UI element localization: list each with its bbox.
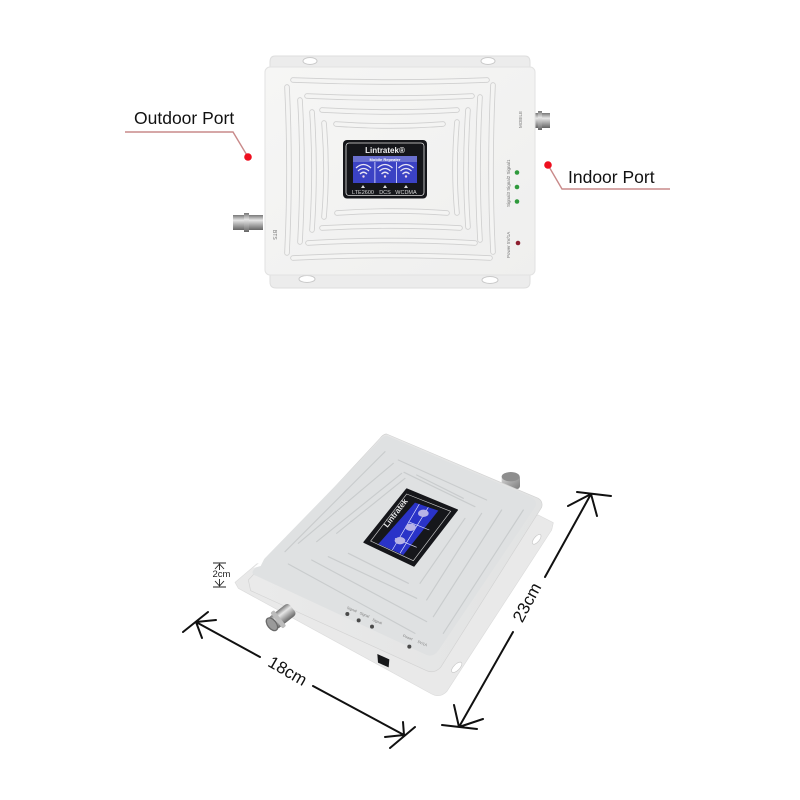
DC power jack — [377, 654, 389, 667]
width dimension: 18cm arrow — [183, 612, 415, 748]
device labels: Signal3 Signal2 Signal1 — [506, 159, 511, 207]
ribs — [285, 452, 523, 633]
LCD display: WCDMA — [395, 190, 417, 196]
LED labels: Signal — [359, 611, 370, 619]
screen — [353, 156, 417, 183]
repeater top view — [233, 56, 550, 288]
status LEDs — [515, 170, 520, 245]
LCD display: DCS — [379, 190, 391, 196]
device labels — [271, 111, 523, 258]
top connector — [502, 472, 520, 489]
flange — [235, 515, 553, 696]
flange notch marks — [253, 455, 361, 568]
left connector — [233, 213, 263, 232]
mounting flange — [270, 56, 530, 288]
body top face — [252, 436, 536, 656]
LCD display — [343, 140, 427, 198]
heat-sink ribs — [287, 80, 493, 258]
LED labels — [346, 606, 428, 648]
wifi icons — [356, 164, 414, 174]
LCD display: Mobile Repeater — [370, 157, 401, 162]
repeater perspective view — [235, 434, 553, 696]
height dimension: 2cm: 2cm — [213, 569, 231, 580]
device labels: Power 5V/1A — [506, 232, 511, 258]
LCD display: Lintratek® — [365, 146, 405, 155]
device labels: BTS — [271, 230, 277, 240]
device labels: MOBILE — [518, 111, 523, 128]
callout: outdoor port: Outdoor Port — [134, 108, 234, 128]
front connector — [262, 600, 299, 635]
LED labels: Signal — [346, 606, 357, 613]
depth dimension: 23cm arrow — [442, 492, 611, 729]
LED labels: Signal — [372, 618, 383, 625]
body panel — [265, 67, 535, 275]
LEDs — [345, 612, 411, 649]
callout: outdoor port — [125, 108, 252, 161]
LCD display: LTE2600 — [352, 190, 374, 196]
LED labels: 5V/1A — [417, 640, 428, 648]
depth dimension: 23cm arrow: 23cm — [509, 580, 545, 625]
height dimension: 2cm — [213, 563, 231, 587]
LCD display — [364, 489, 457, 566]
body side and front band — [248, 434, 542, 672]
callout: indoor port — [544, 161, 670, 189]
width dimension: 18cm arrow: 18cm — [265, 652, 310, 690]
screen — [378, 503, 438, 555]
callout: indoor port: Indoor Port — [568, 167, 655, 187]
logo: Lintratek — [382, 497, 410, 529]
right connector — [533, 111, 550, 130]
LED labels: Power — [402, 634, 414, 642]
flange holes — [450, 533, 543, 674]
